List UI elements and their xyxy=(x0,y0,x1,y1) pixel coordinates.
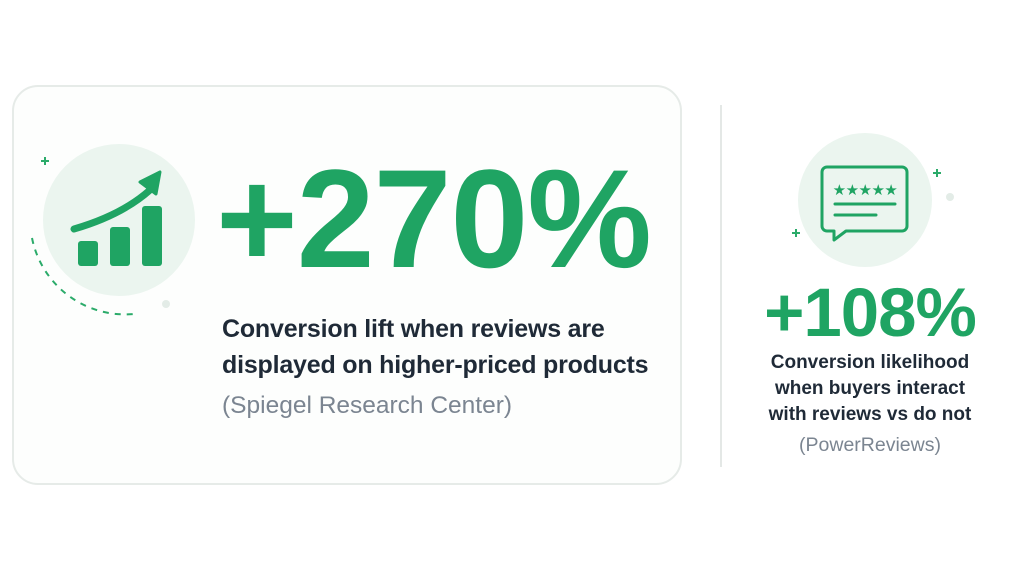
description: Conversion lift when reviews are xyxy=(222,315,605,343)
icon: growth chart xyxy=(31,144,195,316)
icon: review bubble: ★★★★★ xyxy=(833,182,897,199)
description: displayed on higher-priced products xyxy=(222,351,648,379)
description xyxy=(222,315,648,379)
divider xyxy=(720,105,722,467)
icon: review bubble xyxy=(792,133,954,267)
panel: main card xyxy=(12,85,682,485)
description: Conversion likelihood xyxy=(771,352,969,373)
source: (PowerReviews) xyxy=(799,434,941,456)
source: (Spiegel Research Center) xyxy=(222,392,512,419)
stat: +108% xyxy=(764,274,976,351)
big stat: +270% xyxy=(216,140,651,297)
description: when buyers interact xyxy=(775,378,965,399)
panel: secondary stat xyxy=(764,133,976,456)
description: with reviews vs do not xyxy=(769,404,971,425)
description xyxy=(768,352,972,425)
